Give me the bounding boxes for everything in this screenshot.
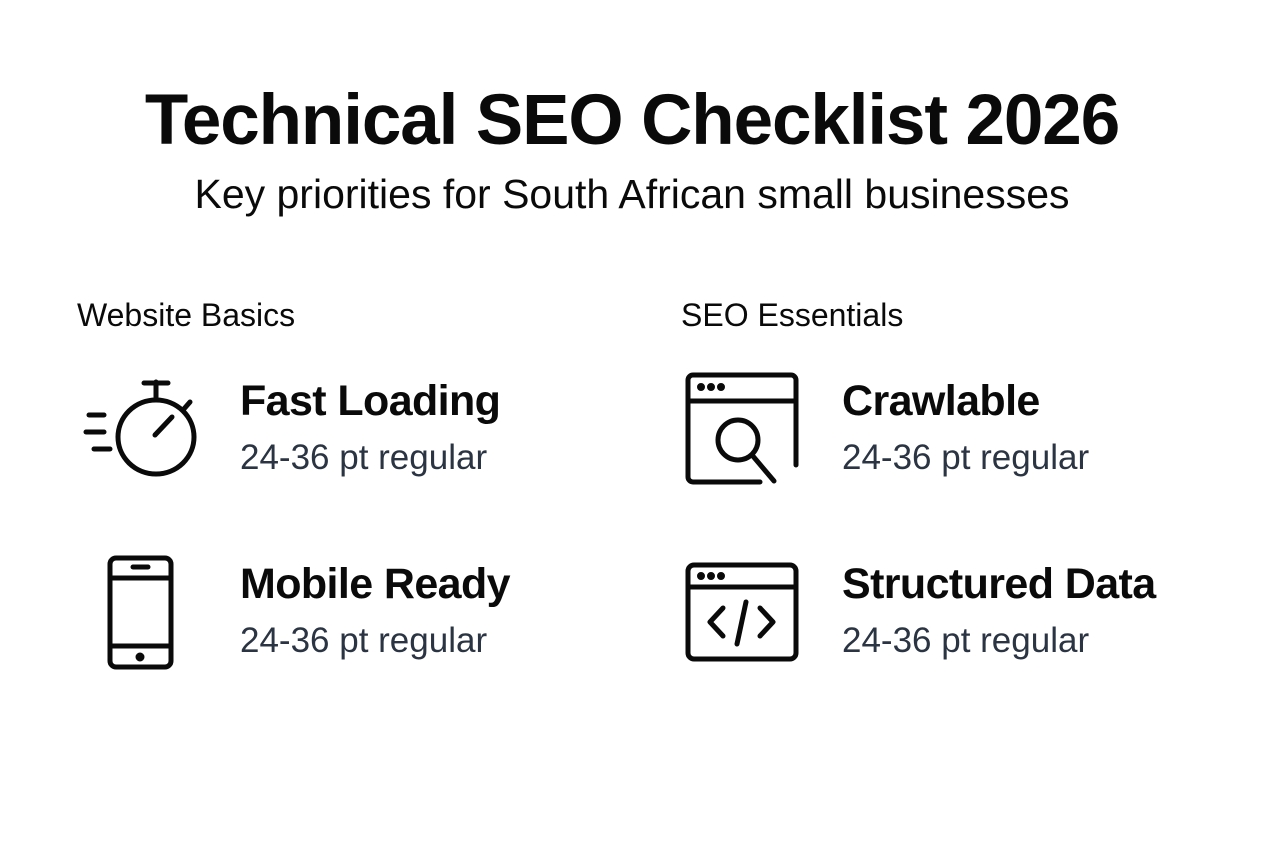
item: Fast Loading: [240, 377, 500, 477]
item: Mobile Ready: 24-36 pt regular: [240, 621, 487, 660]
icon: stopwatch: [84, 380, 196, 476]
section label: Website Basics: Website Basics: [77, 297, 295, 333]
icon: phone: [108, 556, 174, 670]
item: Structured Data: [842, 560, 1156, 660]
title: Technical SEO Checklist 2026: [145, 81, 1119, 160]
item: Crawlable: 24-36 pt regular: [842, 438, 1089, 477]
item: Crawlable: [842, 377, 1089, 477]
item: Fast Loading: 24-36 pt regular: [240, 438, 487, 477]
subtitle: Key priorities for South African small businesses: [194, 171, 1070, 217]
item: Structured Data: 24-36 pt regular: [842, 621, 1089, 660]
icon: browser search: [686, 372, 798, 484]
section label: SEO Essentials: SEO Essentials: [681, 297, 903, 333]
item: Structured Data: Structured Data: [842, 560, 1156, 608]
item: Mobile Ready: Mobile Ready: [240, 560, 510, 608]
item: Mobile Ready: [240, 560, 510, 660]
icon: browser code: [686, 562, 798, 662]
item: Crawlable: Crawlable: [842, 377, 1040, 425]
item: Fast Loading: Fast Loading: [240, 377, 500, 425]
